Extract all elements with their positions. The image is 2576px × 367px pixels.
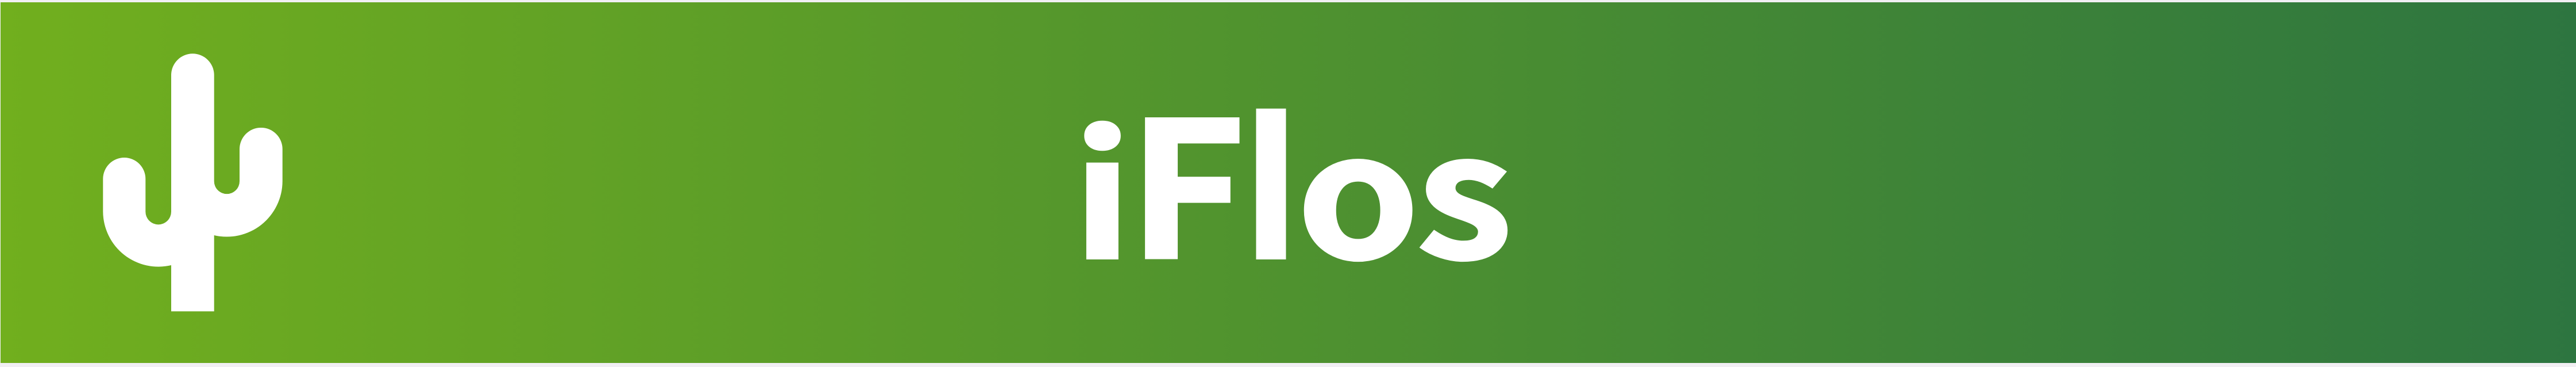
title: iFlos (1073, 40, 1513, 312)
title: iFlos: l (1241, 71, 1301, 304)
title: iFlos: o (1297, 59, 1420, 308)
title: iFlos: s (1416, 59, 1513, 308)
title: iFlos: F (1128, 40, 1245, 312)
title: iFlos: i (1073, 64, 1132, 306)
